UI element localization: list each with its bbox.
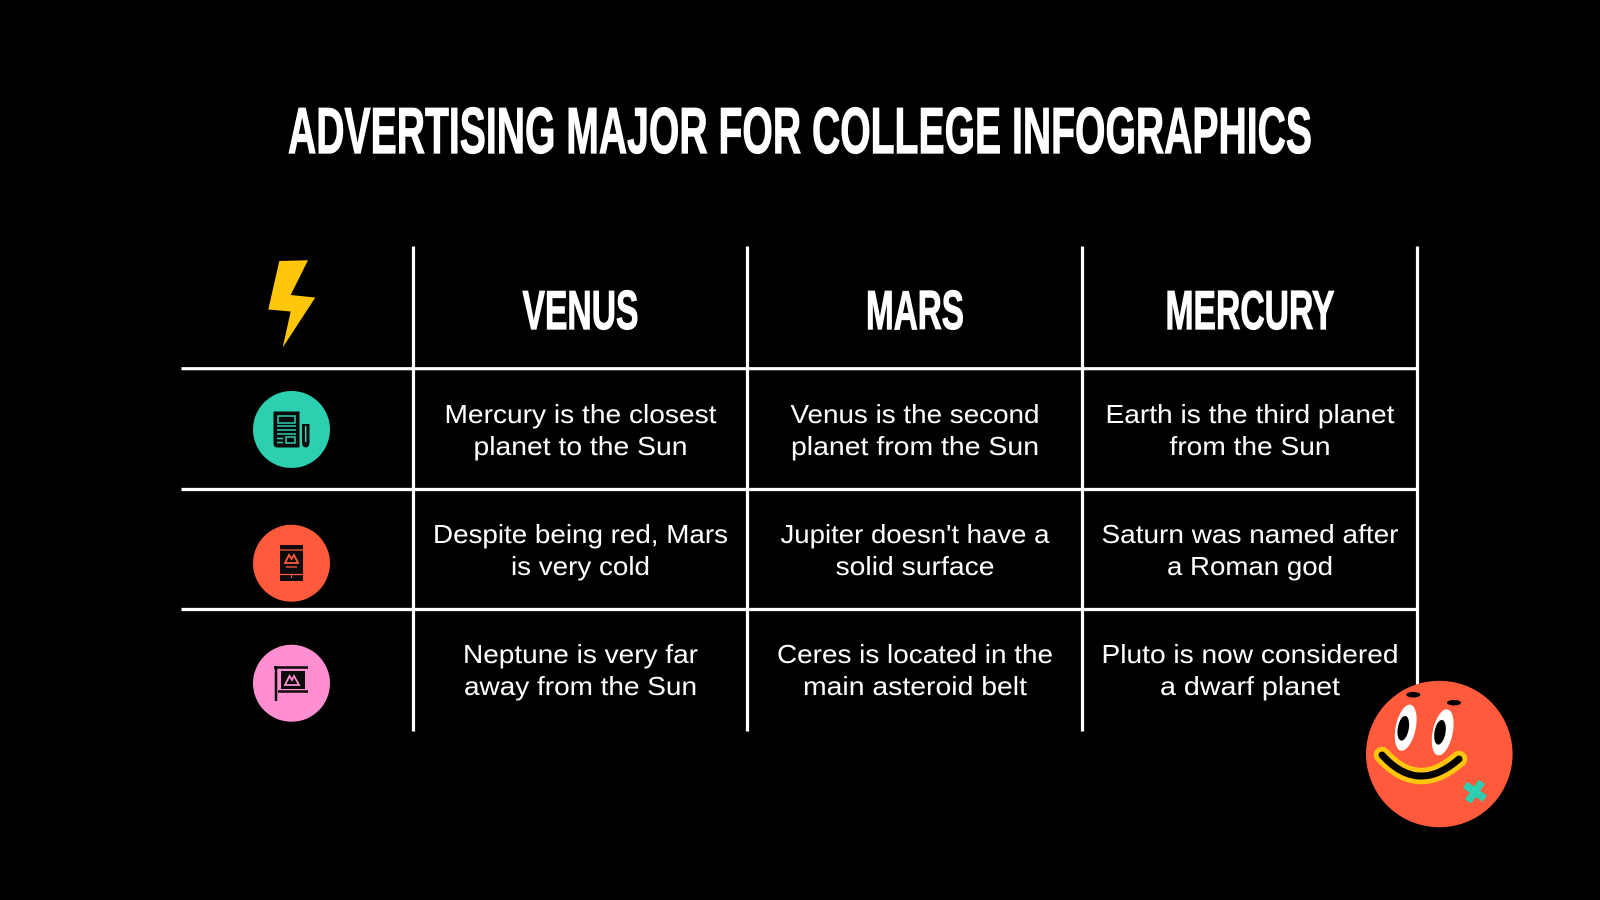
icon: newspaper on teal circle	[253, 391, 330, 468]
cell text: Earth is the third planet	[1106, 399, 1395, 429]
table row 3	[253, 639, 1398, 722]
cell text: Mercury is the closest	[444, 399, 717, 429]
cell text: Neptune is very far	[463, 639, 698, 669]
icon: phone on red circle	[253, 525, 330, 602]
cell text: Ceres is located in the	[777, 639, 1053, 669]
table header row	[268, 260, 1334, 348]
cell text: Saturn was named after	[1102, 519, 1399, 549]
column heading: Mercury: MERCURY	[1166, 279, 1334, 341]
cell text: is very cold	[511, 551, 650, 581]
cell text: Pluto is now considered	[1102, 639, 1398, 669]
smiley face sticker	[1366, 681, 1513, 827]
column heading: Venus: VENUS	[522, 279, 638, 341]
table row 2	[253, 519, 1399, 602]
icon: lightning bolt	[268, 260, 315, 348]
cell text: Venus is the second	[790, 399, 1040, 429]
cell text: main asteroid belt	[803, 671, 1028, 701]
cell text: Jupiter doesn't have a	[780, 519, 1050, 549]
cell text: Despite being red, Mars	[433, 519, 728, 549]
cell text: a Roman god	[1167, 551, 1333, 581]
cell text: from the Sun	[1170, 431, 1330, 461]
cell text: solid surface	[836, 551, 994, 581]
cell text: planet from the Sun	[791, 431, 1039, 461]
cell text: a dwarf planet	[1160, 671, 1341, 701]
column heading: Mars: MARS	[866, 279, 964, 341]
cell text: away from the Sun	[464, 671, 697, 701]
cell text: planet to the Sun	[474, 431, 688, 461]
icon: billboard on pink circle	[253, 645, 330, 722]
table row 1	[253, 391, 1395, 468]
